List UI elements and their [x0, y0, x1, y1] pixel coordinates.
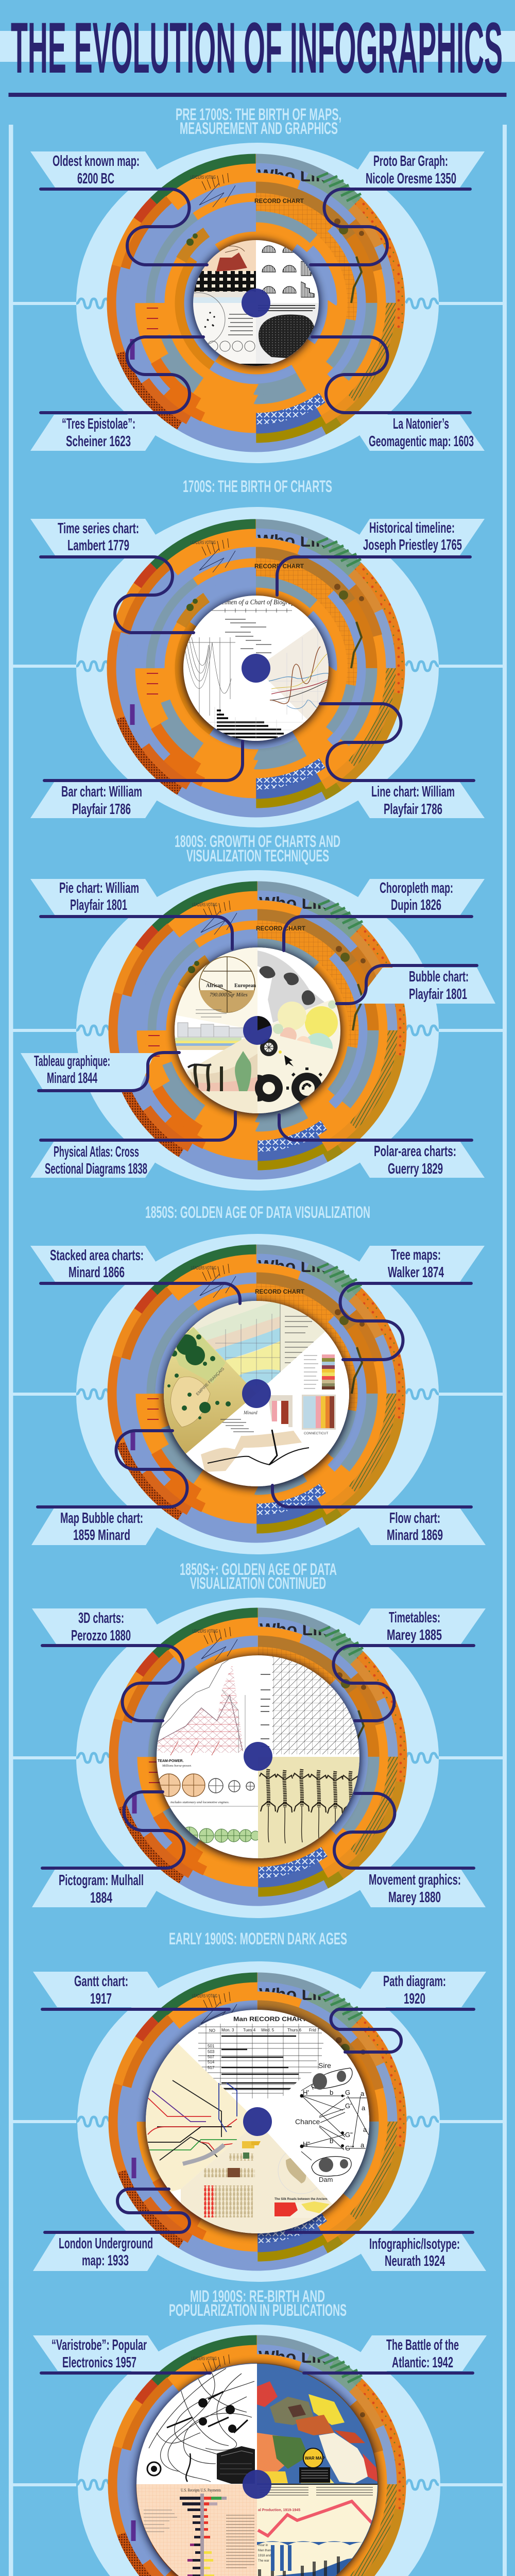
concentric image rings [109, 882, 406, 1179]
hub dot [242, 654, 270, 683]
disc: timeline and line charts: Specimen of a Chart of Biography [212, 599, 301, 606]
heading: pre 1700s: MEASUREMENT AND GRAPHICS [180, 119, 338, 138]
ring image text: LEADERS VOTING [193, 1629, 218, 1634]
disc: wiring, war map, balance of payments and productivity: Man than [258, 2549, 271, 2552]
disc shadow [192, 240, 320, 367]
leader lines [42, 1646, 474, 1868]
ring image text: Who Like [259, 893, 336, 912]
leader lines [38, 1283, 471, 1507]
heading: 1850s+: 1850S+: GOLDEN AGE OF DATA [180, 1560, 337, 1579]
labels: Minard 1866 [68, 1264, 125, 1281]
disc: Minard stacked area, map, tree maps and flow [164, 1301, 349, 1486]
disc: early maps and graphs [193, 240, 319, 366]
labels: Bubble chart: [409, 969, 469, 985]
disc: wiring, war map, balance of payments and productivity [136, 2364, 377, 2576]
disc: wiring, war map, balance of payments and productivity: WAR MAP [305, 2456, 325, 2461]
labels [52, 2337, 468, 2576]
disc: Gantt, path diagram, underground map and isotype: 517 [208, 2065, 215, 2070]
labels: Line chart: William [371, 784, 455, 800]
labels [50, 1247, 444, 1544]
heading: pre 1700s: PRE 1700S: THE BIRTH OF MAPS, [176, 105, 341, 124]
labels [34, 880, 469, 1177]
halo ellipse [76, 1234, 439, 1554]
connector squiggles [13, 662, 503, 671]
ring image text: RECORD CHART [256, 925, 306, 932]
heading: mid 1900s: MID 1900S: RE-BIRTH AND [190, 2287, 325, 2306]
ribbons [30, 151, 485, 451]
ring image text: Who Like [258, 531, 335, 550]
disc: Minard stacked area, map, tree maps and flow: Minard [243, 1410, 258, 1415]
disc shadow [145, 2010, 370, 2235]
heading: 1850s: 1850S: GOLDEN AGE OF DATA VISUALIZATION [145, 1203, 370, 1222]
disc shadow [163, 1301, 350, 1489]
disc: 3D chart, timetable, pictogram and movement [157, 1655, 360, 1858]
labels: Path diagram: [383, 1973, 446, 1990]
labels: 1917 [90, 1991, 112, 2007]
leader lines [39, 917, 477, 1140]
section 2: 1700s [13, 477, 503, 827]
section 5: 1850s continued [13, 1560, 503, 1918]
disc: Gantt, path diagram, underground map and isotype: a [360, 2141, 365, 2149]
disc: Gantt, path diagram, underground map and isotype [146, 2010, 369, 2233]
ring image text: LEADERS VOTING [192, 1993, 217, 1998]
labels: Time series chart: [58, 520, 139, 537]
disc shadow [135, 2364, 379, 2576]
labels: Dupin 1826 [391, 897, 441, 913]
hub dot [242, 289, 270, 317]
disc: pie, choropleth, bubble, polar and atlas: European [234, 983, 256, 989]
labels: Playfair 1801 [409, 986, 467, 1003]
concentric image rings [109, 1608, 407, 1906]
heading: early 1900s: EARLY 1900S: MODERN DARK AGES [169, 1929, 347, 1948]
hub dot [244, 1742, 272, 1771]
disc: Gantt, path diagram, underground map and isotype: Chance [295, 2117, 320, 2126]
ring image text: LEADERS VOTING [191, 175, 216, 180]
halo ellipse [78, 2325, 440, 2576]
labels: Physical Atlas: Cross [54, 1144, 139, 1160]
disc: Gantt, path diagram, underground map and isotype: 507 [208, 2055, 215, 2059]
heading: 1800s [175, 832, 340, 865]
labels: Playfair 1786 [384, 801, 442, 818]
labels [59, 1973, 460, 2269]
labels: Guerry 1829 [388, 1161, 443, 1177]
disc: pie, choropleth, bubble, polar and atlas: African [206, 983, 223, 989]
labels: Atlantic: 1942 [392, 2354, 453, 2371]
ring image text [192, 2350, 325, 2363]
section 4: 1850s [13, 1203, 503, 1554]
section 1: pre 1700s [13, 105, 503, 463]
ring image text [193, 896, 326, 930]
halo ellipse [76, 143, 439, 463]
heading: 1850s+: VISUALIZATION CONTINUED [190, 1574, 326, 1592]
ring image text: Who Like [258, 166, 335, 185]
disc: Gantt, path diagram, underground map and isotype: Man RECORD CHART [233, 2015, 307, 2023]
labels: Tree maps: [391, 1247, 441, 1263]
ring image text [191, 169, 324, 203]
labels: Playfair 1786 [72, 801, 131, 818]
labels: Stacked area charts: [50, 1247, 144, 1264]
ribbons [30, 879, 485, 1178]
disc: Gantt, path diagram, underground map and isotype: Tues 4 [243, 2028, 256, 2032]
labels: Sectional Diagrams 1838 [45, 1161, 147, 1177]
disc: 3D chart, timetable, pictogram and movement: includes stationary and locomotive engines. [170, 1801, 230, 1804]
labels: Playfair 1801 [70, 897, 127, 913]
disc: Gantt, path diagram, underground map and isotype: The Silk Roads between the Ancient Roman and Chinese Empires [274, 2198, 371, 2201]
disc: Gantt, path diagram, underground map and isotype: G''' [345, 2144, 354, 2152]
labels: Map Bubble chart: [60, 1510, 143, 1527]
disc: wiring, war map, balance of payments and productivity: U.S. Receipts U.S. Payments [181, 2488, 221, 2493]
labels: Movement graphics: [369, 1872, 461, 1888]
concentric image rings [109, 1973, 406, 2270]
labels: “Tres Epistolae”: [62, 416, 135, 432]
connector squiggles [13, 2480, 503, 2489]
ring image text: Who Like [260, 1620, 337, 1639]
labels: Scheiner 1623 [66, 433, 131, 450]
disc: Gantt, path diagram, underground map and isotype: G [345, 2089, 350, 2096]
hub dot [243, 2470, 271, 2499]
disc: wiring, war map, balance of payments and productivity: al Production, 1919-1945 [258, 2509, 300, 2512]
hub overlap wedge [258, 1016, 271, 1030]
concentric image rings [107, 519, 405, 817]
labels: “Varistrobe”: Popular [52, 2337, 147, 2353]
ring image text: Who Like [259, 2347, 336, 2366]
disc: Gantt, path diagram, underground map and isotype: G' [345, 2102, 352, 2110]
heading: mid 1900s: POPULARIZATION IN PUBLICATIONS [169, 2301, 347, 2319]
section 3: 1800s [13, 832, 503, 1191]
ring image text: RECORD CHART [254, 563, 304, 570]
connector squiggles [13, 1753, 503, 1762]
labels [53, 153, 474, 450]
labels: London Underground [59, 2235, 153, 2252]
labels: 3D charts: [78, 1610, 124, 1626]
title band [0, 31, 515, 62]
leader lines [41, 2373, 474, 2576]
disc: Gantt, path diagram, underground map and isotype: Dam [319, 2176, 333, 2183]
halo ellipse [76, 1598, 439, 1918]
ring image text: LEADERS VOTING [191, 540, 216, 545]
labels [58, 520, 462, 818]
labels: Polar-area charts: [374, 1143, 456, 1160]
leader lines [41, 189, 470, 413]
labels: Minard 1844 [47, 1070, 97, 1087]
side ribbons [21, 968, 495, 1090]
ribbons [33, 2335, 487, 2576]
disc shadow [182, 596, 330, 743]
ring image text: RECORD CHART [255, 1288, 305, 1295]
labels: Proto Bar Graph: [373, 153, 448, 170]
heading: 1700s: 1700S: THE BIRTH OF CHARTS [183, 477, 332, 496]
labels: Joseph Priestley 1765 [363, 537, 462, 553]
labels: Neurath 1924 [385, 2253, 445, 2269]
labels: 6200 BC [77, 171, 114, 187]
leader lines [42, 2009, 474, 2232]
disc: Gantt, path diagram, underground map and isotype: Frid 7 [309, 2028, 320, 2032]
ribbons [30, 519, 485, 818]
labels: Oldest known map: [53, 153, 140, 170]
disc: 3D chart, timetable, pictogram and movement: Millions horse-power. [162, 1764, 192, 1768]
disc: Minard stacked area, map, tree maps and flow: CONNECTICUT [304, 1432, 328, 1435]
labels: La Natonier’s [393, 416, 449, 432]
connector squiggles [13, 1026, 503, 1035]
labels: Walker 1874 [388, 1264, 444, 1281]
heading: 1800s: 1800S: GROWTH OF CHARTS AND [175, 832, 340, 851]
connector squiggles [13, 2117, 503, 2126]
disc: timeline and line charts [183, 596, 329, 741]
disc: Minard stacked area, map, tree maps and flow: EMPIRE FRANÇAIS [195, 1366, 225, 1397]
labels: Tableau graphique: [34, 1053, 110, 1070]
disc: wiring, war map, balance of payments and productivity: The war [258, 2560, 269, 2563]
labels: Nicole Oresme 1350 [366, 171, 456, 187]
ring image text: Who Like [258, 1257, 335, 1276]
heading: pre 1700s [176, 105, 341, 138]
disc shadow [174, 947, 341, 1115]
labels: Marey 1885 [387, 1627, 442, 1643]
halo ellipse [76, 507, 439, 827]
concentric image rings [108, 2335, 406, 2576]
labels: Lambert 1779 [67, 537, 129, 554]
labels: 1884 [90, 1890, 112, 1906]
ribbons [30, 1246, 486, 1545]
disc: Gantt, path diagram, underground map and isotype: 503 [208, 2049, 215, 2054]
disc: wiring, war map, balance of payments and productivity: Hour in [258, 2544, 268, 2547]
disc: Gantt, path diagram, underground map and isotype: Sire [318, 2061, 331, 2070]
concentric image rings [108, 1245, 405, 1543]
disc: Gantt, path diagram, underground map and isotype: G" [345, 2131, 353, 2139]
labels: Choropleth map: [380, 880, 453, 896]
connector squiggles [13, 299, 503, 308]
labels [59, 1609, 461, 1906]
ring image text: LEADERS VOTING [192, 2356, 217, 2361]
connector squiggles [13, 1389, 503, 1399]
disc: Gantt, path diagram, underground map and isotype: b [330, 2089, 333, 2096]
ribbons [33, 1972, 486, 2271]
ring image text: LEADERS VOTING [192, 902, 217, 907]
hub dot [243, 1016, 272, 1045]
labels: Flow chart: [389, 1510, 440, 1527]
halo ellipse [77, 1961, 440, 2282]
disc: Gantt, path diagram, underground map and isotype: Thurs.6 [287, 2028, 302, 2032]
hub dot [243, 2107, 272, 2136]
heading: mid 1900s [169, 2287, 347, 2319]
ring image text [191, 534, 324, 568]
disc: pie, choropleth, bubble, polar and atlas [175, 947, 340, 1113]
disc: Gantt, path diagram, underground map and isotype: a [360, 2090, 365, 2097]
disc: Gantt, path diagram, underground map and isotype: Mon. 3 [221, 2028, 234, 2032]
title rule [8, 93, 507, 97]
disc: Gantt, path diagram, underground map and isotype: H" [303, 2140, 310, 2148]
labels: Minard 1869 [387, 1527, 443, 1544]
concentric image rings [107, 154, 405, 452]
labels: Perozzo 1880 [71, 1628, 131, 1644]
section 7: mid 1900s [13, 2287, 503, 2576]
labels: map: 1933 [82, 2252, 129, 2269]
heading: 1850s+ [180, 1560, 337, 1592]
ring image text: Who Like [259, 1985, 336, 2004]
labels: Gantt chart: [74, 1973, 128, 1990]
ring image text: RECORD CHART [254, 197, 304, 205]
disc: Gantt, path diagram, underground map and isotype: 501 [208, 2044, 215, 2048]
ribbons [32, 1608, 486, 1907]
disc: pie, choropleth, bubble, polar and atlas: 790.000 Sqr Miles [210, 992, 248, 998]
disc: 3D chart, timetable, pictogram and movement: TEAM-POWER. [158, 1759, 184, 1763]
labels: Timetables: [389, 1609, 440, 1626]
labels: Infographic/Isotype: [369, 2236, 460, 2252]
leader lines [41, 557, 474, 781]
labels: The Battle of the [386, 2337, 459, 2353]
disc: Gantt, path diagram, underground map and isotype: Wed. 5 [261, 2028, 274, 2032]
disc: Gantt, path diagram, underground map and isotype: a [362, 2104, 366, 2112]
disc: Gantt, path diagram, underground map and isotype: a [363, 2126, 367, 2133]
labels: Electronics 1957 [62, 2354, 136, 2371]
disc: wiring, war map, balance of payments and productivity: 1918 and [258, 2554, 271, 2557]
halo ellipse [76, 870, 439, 1191]
ring image text [193, 1988, 326, 2000]
disc: Gantt, path diagram, underground map and isotype: H' [303, 2089, 309, 2096]
ring image text [193, 1623, 327, 1635]
disc: Gantt, path diagram, underground map and isotype: NO [209, 2028, 215, 2033]
labels: Historical timeline: [369, 520, 455, 536]
labels: Marey 1880 [388, 1889, 441, 1906]
labels: Bar chart: William [61, 784, 142, 800]
hub dot [242, 1379, 271, 1408]
labels: Pictogram: Mulhall [59, 1872, 144, 1889]
labels: 1859 Minard [73, 1527, 130, 1544]
disc shadow [156, 1655, 360, 1860]
disc: Gantt, path diagram, underground map and isotype: b [330, 2137, 333, 2145]
labels: Pie chart: William [59, 880, 139, 896]
heading: 1800s: VISUALIZATION TECHNIQUES [186, 846, 329, 865]
section 6: early 1900s [13, 1929, 503, 2282]
labels: 1920 [404, 1991, 425, 2007]
ring image text [192, 1260, 325, 1294]
ring image text: LEADERS VOTING [191, 1265, 216, 1270]
disc: Gantt, path diagram, underground map and isotype: 514 [208, 2060, 215, 2064]
